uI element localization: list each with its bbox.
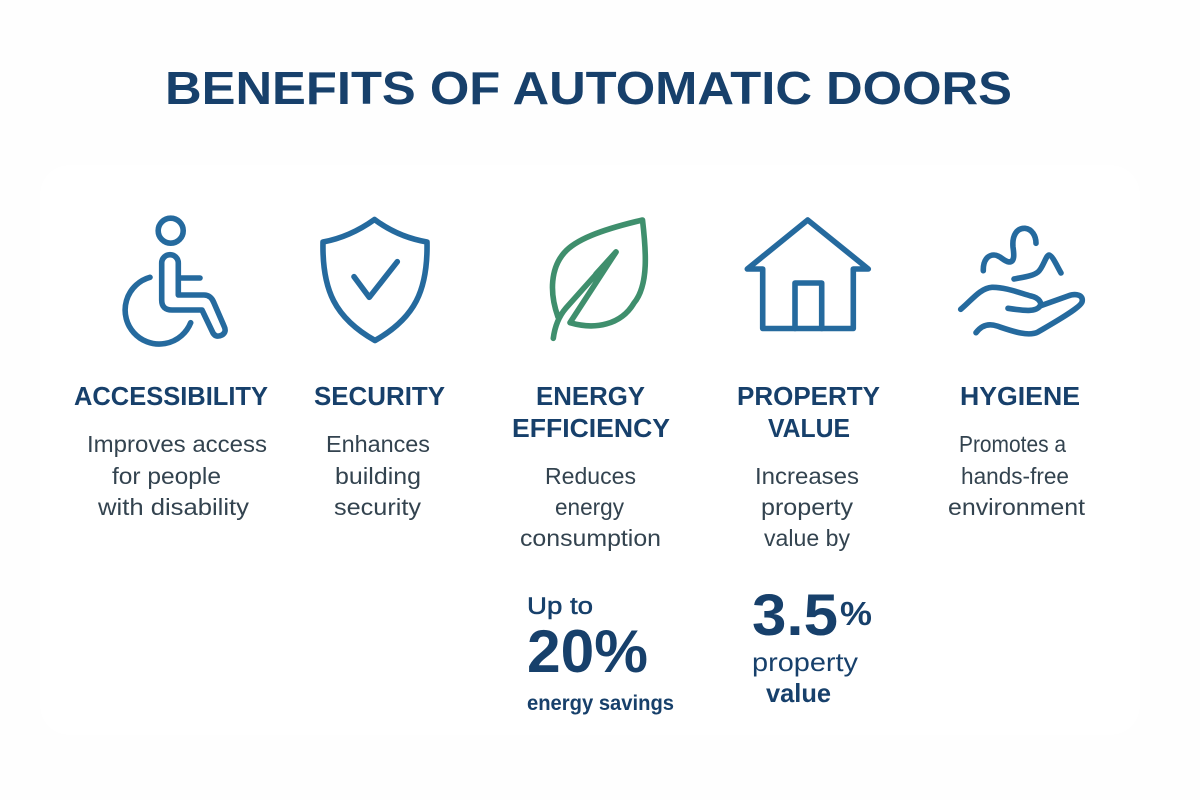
text: energy description: energy bbox=[555, 494, 624, 520]
column: accessibility bbox=[74, 218, 268, 520]
column: security bbox=[314, 220, 445, 520]
stat: 20% energy savings: Up to bbox=[527, 593, 593, 620]
text: accessibility description: with disability bbox=[97, 494, 249, 520]
text: property description: property bbox=[761, 494, 853, 520]
icon: leaf bbox=[552, 220, 645, 338]
heading: property value: VALUE bbox=[768, 415, 850, 443]
stat: 20% energy savings: energy savings bbox=[527, 692, 674, 715]
heading: energy efficiency: EFFICIENCY bbox=[512, 415, 670, 443]
text: hygiene description bbox=[948, 431, 1085, 520]
icon: hand with waves bbox=[961, 228, 1082, 334]
stat: 3.5% property value: 3.5 bbox=[752, 583, 838, 648]
heading: energy efficiency: ENERGY bbox=[536, 383, 645, 411]
text: security description bbox=[326, 431, 430, 520]
heading: accessibility: ACCESSIBILITY bbox=[74, 383, 268, 411]
text: energy description bbox=[520, 463, 661, 551]
title: BENEFITS OF AUTOMATIC DOORS bbox=[165, 62, 1012, 114]
text: property description: value by bbox=[764, 525, 850, 551]
text: accessibility description bbox=[87, 431, 267, 520]
heading: energy efficiency bbox=[512, 383, 670, 443]
column: energy efficiency bbox=[512, 220, 674, 715]
text: property description bbox=[755, 463, 859, 551]
text: security description: security bbox=[334, 494, 421, 520]
icon: wheelchair user bbox=[125, 218, 225, 344]
stat: 3.5% property value: value bbox=[766, 678, 831, 708]
text: energy description: consumption bbox=[520, 525, 661, 551]
text: energy description: Reduces bbox=[545, 463, 636, 489]
text: security description: Enhances bbox=[326, 431, 430, 457]
text: accessibility description: Improves access bbox=[87, 431, 267, 457]
stat: 20% energy savings bbox=[527, 593, 674, 715]
text: hygiene description: hands-free bbox=[961, 463, 1069, 489]
stat: 20% energy savings: 20% bbox=[527, 618, 648, 685]
stat: 3.5% property value bbox=[752, 583, 872, 708]
heading: property value bbox=[737, 383, 880, 443]
text: security description: building bbox=[335, 463, 421, 489]
text: hygiene description: Promotes a bbox=[959, 431, 1067, 457]
panel: benefits background bbox=[40, 165, 1140, 735]
icon: house bbox=[747, 220, 868, 328]
text: accessibility description: for people bbox=[112, 463, 221, 489]
icon: shield with check bbox=[323, 220, 427, 340]
heading: security: SECURITY bbox=[314, 383, 445, 411]
text: hygiene description: environment bbox=[948, 494, 1085, 520]
stat: 3.5% property value: property bbox=[752, 647, 858, 677]
stat: 3.5% property value: % bbox=[840, 595, 872, 632]
column: property value bbox=[737, 220, 880, 708]
text: property description: Increases bbox=[755, 463, 859, 489]
heading: property value: PROPERTY bbox=[737, 383, 880, 411]
heading: hygiene: HYGIENE bbox=[960, 383, 1080, 411]
column: hygiene bbox=[948, 228, 1085, 520]
